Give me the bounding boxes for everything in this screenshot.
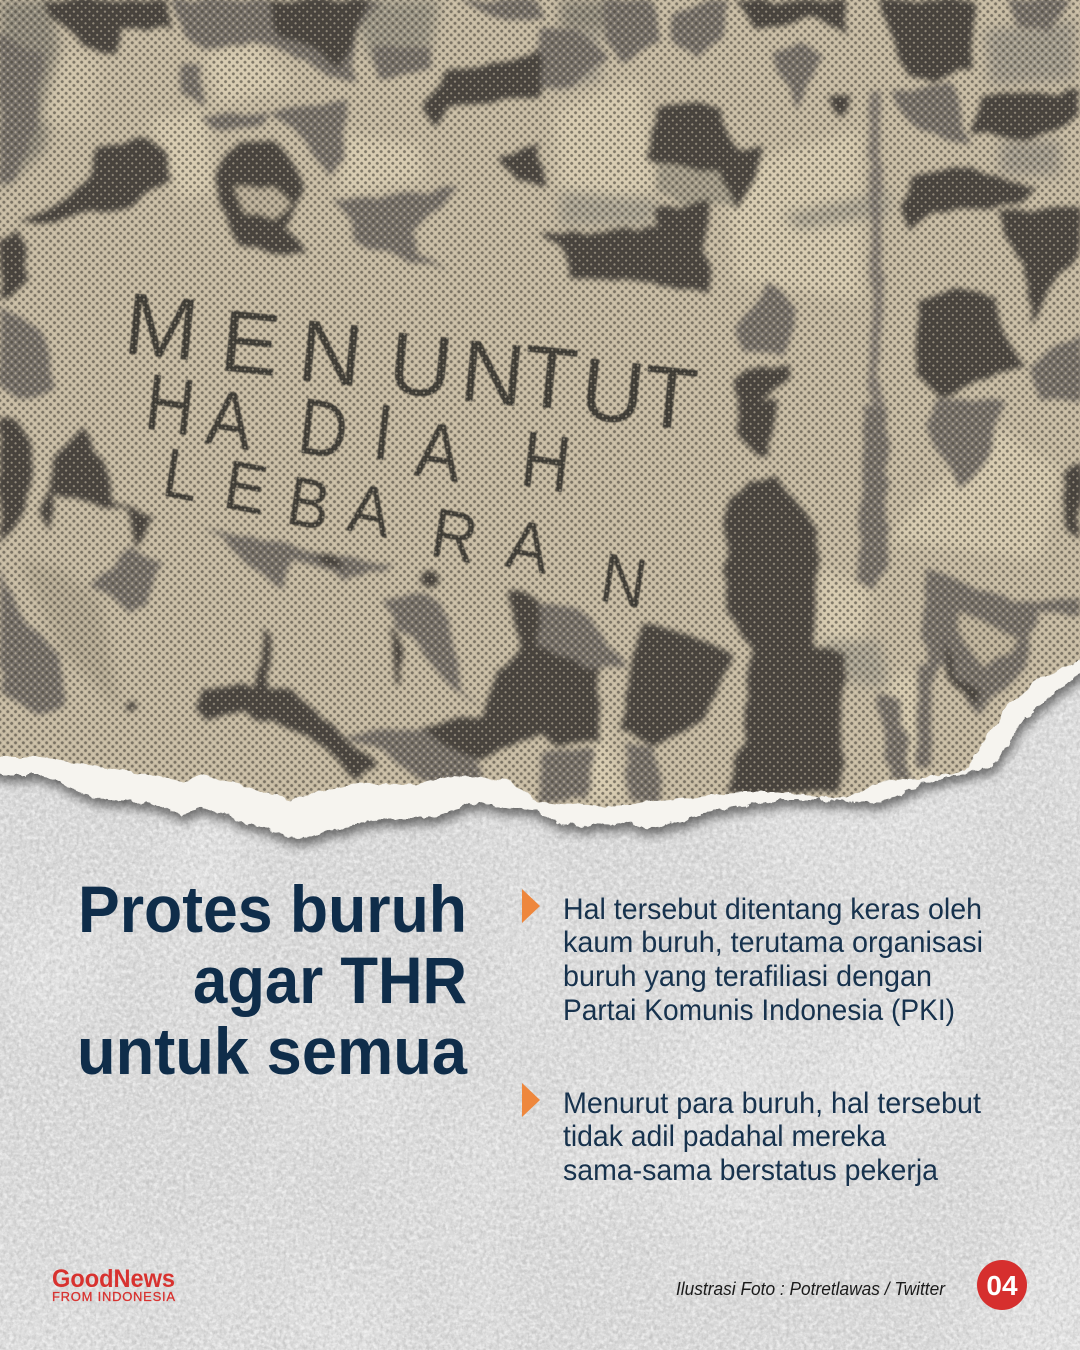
text block: bullet 1: Hal tersebut ditentang keras oleh bbox=[563, 893, 982, 926]
icon: orange bullet 2 bbox=[522, 1083, 540, 1117]
lower left bbox=[0, 420, 34, 547]
title: Protes buruh bbox=[78, 872, 467, 946]
title: untuk semua bbox=[77, 1014, 468, 1088]
photo: protest crowd with banner bbox=[0, 0, 1080, 850]
text block: bullet 1: Partai Komunis Indonesia (PKI) bbox=[563, 994, 955, 1027]
lower right bbox=[723, 477, 843, 793]
text block: bullet 2 bbox=[563, 1087, 982, 1187]
logo: GoodNews from Indonesia: FROM INDONESIA bbox=[52, 1289, 175, 1304]
text block: bullet 2: sama-sama berstatus pekerja bbox=[563, 1154, 938, 1187]
halftone dots bbox=[0, 0, 1080, 850]
torn paper white edge bbox=[0, 640, 1080, 838]
banner lettering bbox=[128, 292, 698, 608]
photo credit: Ilustrasi Foto : Potretlawas / Twitter bbox=[676, 1279, 946, 1299]
banner lettering: MENUNTUT bbox=[120, 273, 702, 450]
text block: bullet 2: Menurut para buruh, hal tersebut bbox=[563, 1087, 982, 1120]
dark figures bbox=[0, 0, 1080, 800]
title: agar THR bbox=[193, 943, 467, 1017]
banner lettering: HADIAH bbox=[141, 357, 576, 510]
crowd: right half bbox=[647, 102, 761, 210]
text block: bullet 1 bbox=[563, 893, 983, 1027]
icon: orange bullet 1 bbox=[522, 889, 540, 923]
page number badge: 04 bbox=[986, 1270, 1018, 1301]
text block: bullet 1: kaum buruh, terutama organisasi bbox=[563, 926, 983, 959]
logo: GoodNews from Indonesia bbox=[52, 1265, 175, 1304]
page number badge bbox=[977, 1260, 1027, 1310]
crowd: left half bbox=[172, 0, 379, 83]
text block: bullet 1: buruh yang terafiliasi dengan bbox=[563, 960, 932, 993]
banner lettering: LEBARAN bbox=[158, 434, 652, 624]
light shirts and faces bbox=[0, 0, 1075, 800]
text block: bullet 2: tidak adil padahal mereka bbox=[563, 1120, 886, 1153]
logo: GoodNews from Indonesia: GoodNews bbox=[52, 1265, 175, 1293]
title bbox=[77, 872, 468, 1088]
